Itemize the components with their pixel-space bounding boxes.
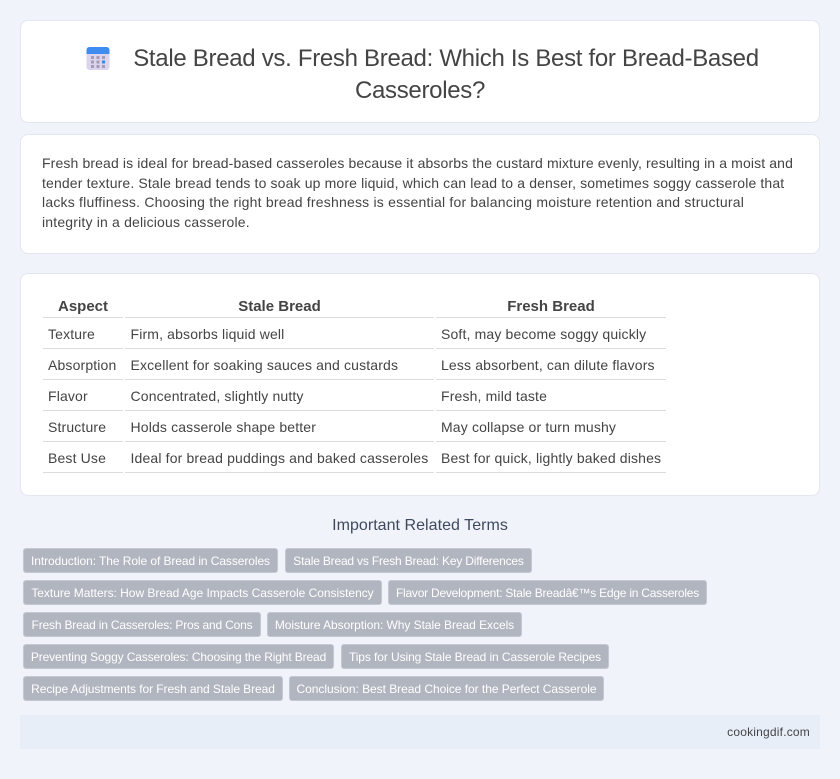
table: May collapse or turn mushy <box>441 419 616 435</box>
intro text: Fresh bread is ideal for bread-based casseroles because it absorbs the custard mixture evenly, resulting in a moist and <box>42 155 793 171</box>
intro text: lacks fluffiness. Choosing the right bread freshness is essential for balancing moisture retention and structural <box>42 194 744 210</box>
table: Structure <box>48 419 106 435</box>
intro text: integrity in a delicious casserole. <box>42 214 250 230</box>
related term tags: Introduction: The Role of Bread in Casseroles <box>31 554 270 568</box>
table: Excellent for soaking sauces and custards <box>130 357 398 373</box>
table: Stale Bread <box>238 298 321 315</box>
table: Fresh, mild taste <box>441 388 547 404</box>
table: Soft, may become soggy quickly <box>441 326 646 342</box>
table: Aspect <box>58 298 108 315</box>
table: Ideal for bread puddings and baked casseroles <box>130 450 428 466</box>
intro text: tender texture. Stale bread tends to soak up more liquid, which can lead to a denser, sometimes soggy casserole that <box>42 174 784 190</box>
footer bar <box>20 715 820 749</box>
related term tags: Preventing Soggy Casseroles: Choosing the Right Bread <box>31 650 326 664</box>
panel: introduction <box>20 134 820 254</box>
related term tags: Fresh Bread in Casseroles: Pros and Cons <box>32 618 252 632</box>
related term tags <box>23 548 707 701</box>
related term tags: Texture Matters: How Bread Age Impacts Casserole Consistency <box>31 586 374 600</box>
table: Texture <box>48 326 95 342</box>
table: Firm, absorbs liquid well <box>130 326 284 342</box>
related term tags: Conclusion: Best Bread Choice for the Perfect Casserole <box>297 682 596 696</box>
title: Stale Bread vs. Fresh Bread: Which Is Best for Bread-Based <box>133 45 759 72</box>
table: Best Use <box>48 450 106 466</box>
title <box>133 45 759 104</box>
table: Holds casserole shape better <box>130 419 316 435</box>
related term tags: Stale Bread vs Fresh Bread: Key Differences <box>293 554 524 568</box>
footer source: cookingdif.com <box>727 725 810 739</box>
panel: header <box>20 20 820 123</box>
table: Fresh Bread <box>507 298 595 315</box>
icon: calendar <box>86 47 110 70</box>
title: Casseroles? <box>355 77 485 104</box>
related term tags: Tips for Using Stale Bread in Casserole Recipes <box>349 650 601 664</box>
panel: comparison table <box>20 273 820 496</box>
table: Absorption <box>48 357 116 373</box>
heading: related terms: Important Related Terms <box>332 517 508 534</box>
table: Concentrated, slightly nutty <box>130 388 304 404</box>
table: Less absorbent, can dilute flavors <box>441 357 655 373</box>
table: Flavor <box>48 388 88 404</box>
table: Best for quick, lightly baked dishes <box>441 450 661 466</box>
related term tags: Moisture Absorption: Why Stale Bread Excels <box>275 618 514 632</box>
table <box>43 298 666 473</box>
related term tags: Flavor Development: Stale Breadâ€™s Edge in Casseroles <box>396 586 699 600</box>
related term tags: Recipe Adjustments for Fresh and Stale Bread <box>31 682 275 696</box>
intro text <box>42 155 793 230</box>
